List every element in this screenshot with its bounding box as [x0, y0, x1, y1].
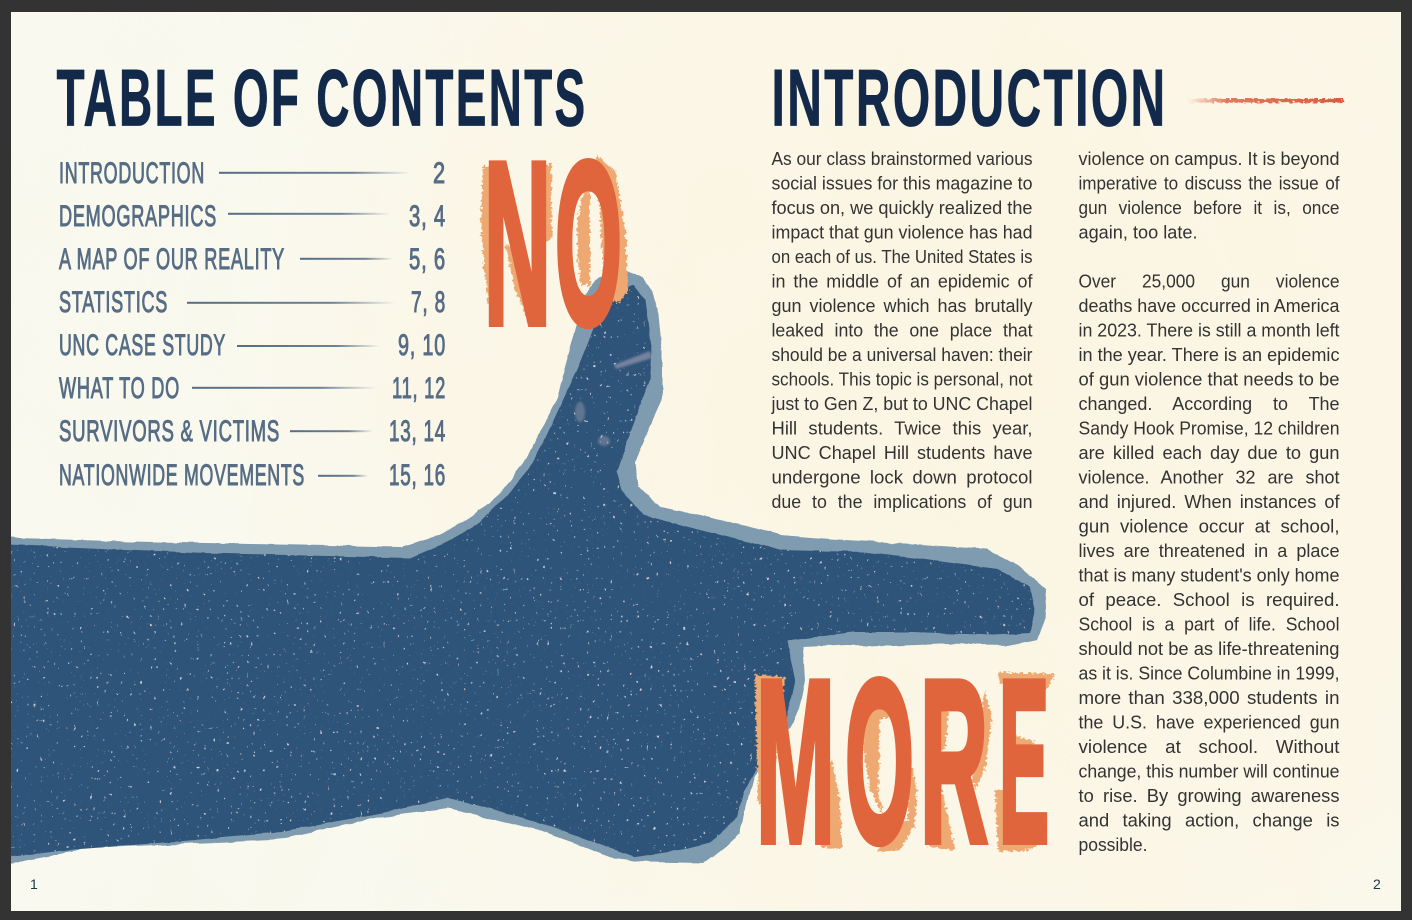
- word: MORE: R: [920, 632, 988, 892]
- body text: right column: as it is. Since Columbine in 1999,: [1078, 664, 1340, 684]
- body text: right column: of peace. School is required.: [1078, 590, 1340, 610]
- body text: left column: should be a universal haven: their: [772, 345, 1032, 365]
- entry: unc case study: 9, 10: [398, 329, 446, 362]
- body text: left column: focus on, we quickly realized the: [772, 198, 1032, 218]
- thumb scratch marks: [575, 351, 652, 446]
- word: MORE: O: [845, 632, 914, 892]
- entry: survivors and victims: 13, 14: [389, 415, 446, 448]
- text: O: [555, 114, 622, 374]
- page number: right: 2: [1373, 876, 1381, 892]
- heading: table of contents: TABLE OF CONTENTS: [56, 54, 588, 144]
- body text: right column: should not be as life-threatening: [1078, 639, 1340, 659]
- entry: demographics: [59, 200, 446, 233]
- body text: right column: deaths have occurred in America: [1078, 296, 1340, 316]
- body text: left column: impact that gun violence has had: [772, 222, 1032, 242]
- body text: left column: schools. This topic is personal, not: [772, 370, 1032, 390]
- word: NO: N: [484, 114, 551, 374]
- hand outline layer: [0, 270, 1047, 866]
- entry: a map of our reality: A MAP OF OUR REALITY: [59, 243, 285, 276]
- table of contents list: [59, 157, 446, 492]
- body text: right column: gun violence occur at school,: [1078, 516, 1340, 536]
- body text: left column: Hill students. Twice this year,: [772, 418, 1032, 438]
- entry: what to do: [59, 372, 446, 405]
- hand fill with speckled texture: [0, 285, 1035, 858]
- body text: left column: leaked into the one place that: [772, 320, 1032, 340]
- entry: nationwide movements: 15, 16: [389, 459, 446, 492]
- body text: left column: in the middle of an epidemic of: [772, 272, 1033, 292]
- entry: a map of our reality: 5, 6: [409, 243, 446, 276]
- body text: right column: again, too late.: [1078, 222, 1198, 242]
- word: MORE: [755, 632, 1056, 892]
- body text: right column: and taking action, change is: [1078, 810, 1340, 830]
- illustration: pointing hand: [0, 270, 1047, 866]
- page number: left: 1: [30, 876, 38, 892]
- body text: left column: due to the implications of gun: [772, 492, 1032, 512]
- body text: right column: Sandy Hook Promise, 12 children: [1078, 418, 1340, 438]
- entry: unc case study: UNC CASE STUDY: [59, 329, 226, 362]
- brushed pale layer: [481, 156, 628, 326]
- body text: right column: change, this number will continue: [1078, 762, 1340, 782]
- body text: right column: and injured. When instances of: [1078, 492, 1340, 512]
- entry: introduction: INTRODUCTION: [59, 157, 205, 190]
- body text: right column: in the year. There is an epidemic: [1078, 345, 1340, 365]
- body text: right column: of gun violence that needs to be: [1078, 370, 1340, 390]
- entry: what to do: 11, 12: [392, 372, 446, 405]
- entry: survivors and victims: SURVIVORS & VICTIMS: [59, 415, 280, 448]
- body text: right column: more than 338,000 students in: [1078, 688, 1340, 708]
- body text: right column: violence at school. Without: [1078, 737, 1340, 757]
- entry: statistics: STATISTICS: [59, 286, 168, 319]
- entry: statistics: 7, 8: [411, 286, 446, 319]
- decorative red brush stroke: [1187, 98, 1343, 103]
- body text: left column: UNC Chapel Hill students have: [772, 443, 1032, 463]
- brushed pale layer: [755, 672, 1056, 852]
- entry: introduction: 2: [433, 157, 446, 190]
- body text: left column: undergone lock down protocol: [772, 468, 1032, 488]
- entry: what to do: WHAT TO DO: [59, 372, 180, 405]
- body text: right column: [1078, 149, 1340, 855]
- body text: right column: are killed each day due to gun: [1078, 443, 1340, 463]
- body text: right column: to rise. By growing awareness: [1078, 786, 1340, 806]
- entry: demographics: 3, 4: [409, 200, 446, 233]
- body text: right column: that is many student's only home: [1078, 566, 1340, 586]
- body text: right column: gun violence before it is, once: [1078, 198, 1340, 218]
- body text: right column: violence on campus. It is beyond: [1078, 149, 1340, 169]
- text: E: [999, 632, 1049, 892]
- body text: right column: possible.: [1078, 835, 1148, 855]
- body text: left column: just to Gen Z, but to UNC Chapel: [771, 394, 1032, 414]
- entry: statistics: [59, 286, 446, 319]
- body text: right column: the U.S. have experienced gun: [1078, 712, 1340, 732]
- entry: demographics: DEMOGRAPHICS: [59, 200, 217, 233]
- body text: left column: [771, 149, 1033, 512]
- body text: right column: School is a part of life. School: [1078, 614, 1340, 634]
- entry: nationwide movements: NATIONWIDE MOVEMENTS: [59, 459, 305, 492]
- body text: right column: in 2023. There is still a month left: [1078, 320, 1340, 340]
- entry: introduction: [59, 157, 446, 190]
- body text: right column: changed. According to The: [1078, 394, 1340, 414]
- body text: right column: lives are threatened in a place: [1078, 541, 1340, 561]
- body text: left column: As our class brainstormed various: [772, 149, 1032, 169]
- body text: right column: imperative to discuss the issue of: [1078, 174, 1340, 194]
- body text: left column: social issues for this magazine to: [772, 174, 1032, 194]
- body text: right column: Over 25,000 gun violence: [1078, 272, 1340, 292]
- body text: right column: violence. Another 32 are shot: [1078, 468, 1340, 488]
- body text: left column: gun violence which has brutally: [772, 296, 1032, 316]
- word: MORE: M: [756, 632, 835, 892]
- body text: left column: on each of us. The United States is: [772, 247, 1032, 267]
